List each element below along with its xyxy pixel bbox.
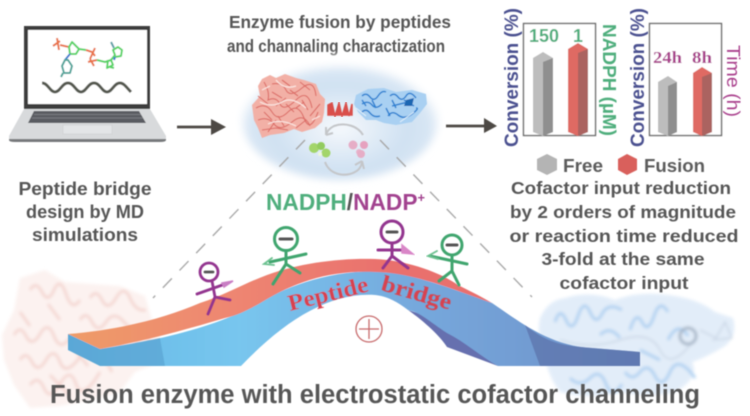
NADPH molecules [309,142,330,158]
heading: enzyme fusion [227,12,451,56]
text: NADPH/NADP+: NADPH/NADP [266,189,418,215]
y axis: conversion: Conversion (%) [502,8,523,147]
figure: green negative charge right [428,235,467,285]
value labels: 1 [573,26,583,46]
peptide linker [328,103,352,116]
bar: fusion [568,43,588,136]
y axis: time: Time (h) [723,45,743,117]
figure: purple negative charge left [197,263,233,314]
arrow: laptop to enzyme [177,119,226,135]
icon: laptop with molecule on screen [9,26,166,142]
peptide wave on screen [42,83,131,92]
y axis: NADPH: NADPH (µM) [599,24,619,136]
faded enzyme right [539,294,734,396]
value labels: 8h [692,48,713,67]
dashed zoom line right [380,140,532,297]
chart: conversion vs NADPH [502,8,619,147]
value labels [653,48,713,67]
value labels: 150 [529,26,559,46]
figure: green negative charge left [264,228,306,284]
cofactor cycle arrows [325,124,364,175]
red negative layer [68,259,492,349]
faded enzyme left [2,270,165,408]
text: peptide bridge design: design by MD [26,202,144,222]
blue enzyme domain [354,88,427,125]
title: fusion enzyme with electrostatic cofactor channeling: Fusion enzyme with electrostatic cofactor channeling [50,381,700,409]
label: peptide: Peptide [285,272,371,316]
red enzyme domain [252,74,325,138]
value labels: 24h [653,48,683,67]
text: peptide bridge design: simulations [32,225,138,245]
text: result summary: Cofactor input reduction [511,178,731,198]
heading: enzyme fusion: and channaling charactization [227,36,445,56]
panel: fusion enzyme in halo [241,56,439,180]
NADP+ molecules [348,140,368,158]
arrow: enzyme to charts [446,118,497,133]
y axis: conversion: Conversion (%) [628,8,649,147]
text: peptide bridge design: Peptide bridge [18,179,152,199]
legend: fusion [618,154,705,176]
legend: free [537,154,603,176]
legend: free: Free [563,156,603,176]
peptide bridge ribbon [68,259,640,366]
shaded underside [408,310,498,366]
text: result summary: by 2 orders of magnitude [510,202,736,222]
dashed zoom line left [153,140,305,298]
right darkened overlap [525,325,640,366]
text: NADPH/NADP+: + [417,190,425,205]
value labels [529,26,583,46]
molecule on screen [53,38,122,77]
chart: conversion vs time [628,8,743,147]
blue positive layer [68,271,640,366]
background halo [241,56,439,180]
text: peptide bridge design [18,179,152,245]
label: bridge: bridge [379,271,455,315]
bar: fusion [693,67,712,136]
bar: free [658,76,677,136]
legend: fusion: Fusion [644,156,705,176]
text: result summary: or reaction time reduced [510,226,738,246]
figure: purple negative charge right [378,221,413,268]
left darkened overlap [68,334,165,366]
legend [537,154,705,176]
bar: free [533,52,553,136]
heading: enzyme fusion: Enzyme fusion by peptides [229,12,451,32]
text: result summary: 3-fold at the same [542,249,705,269]
text: result summary [510,178,738,293]
text: result summary: cofactor input [560,273,689,293]
icon: positive charge [356,316,382,342]
